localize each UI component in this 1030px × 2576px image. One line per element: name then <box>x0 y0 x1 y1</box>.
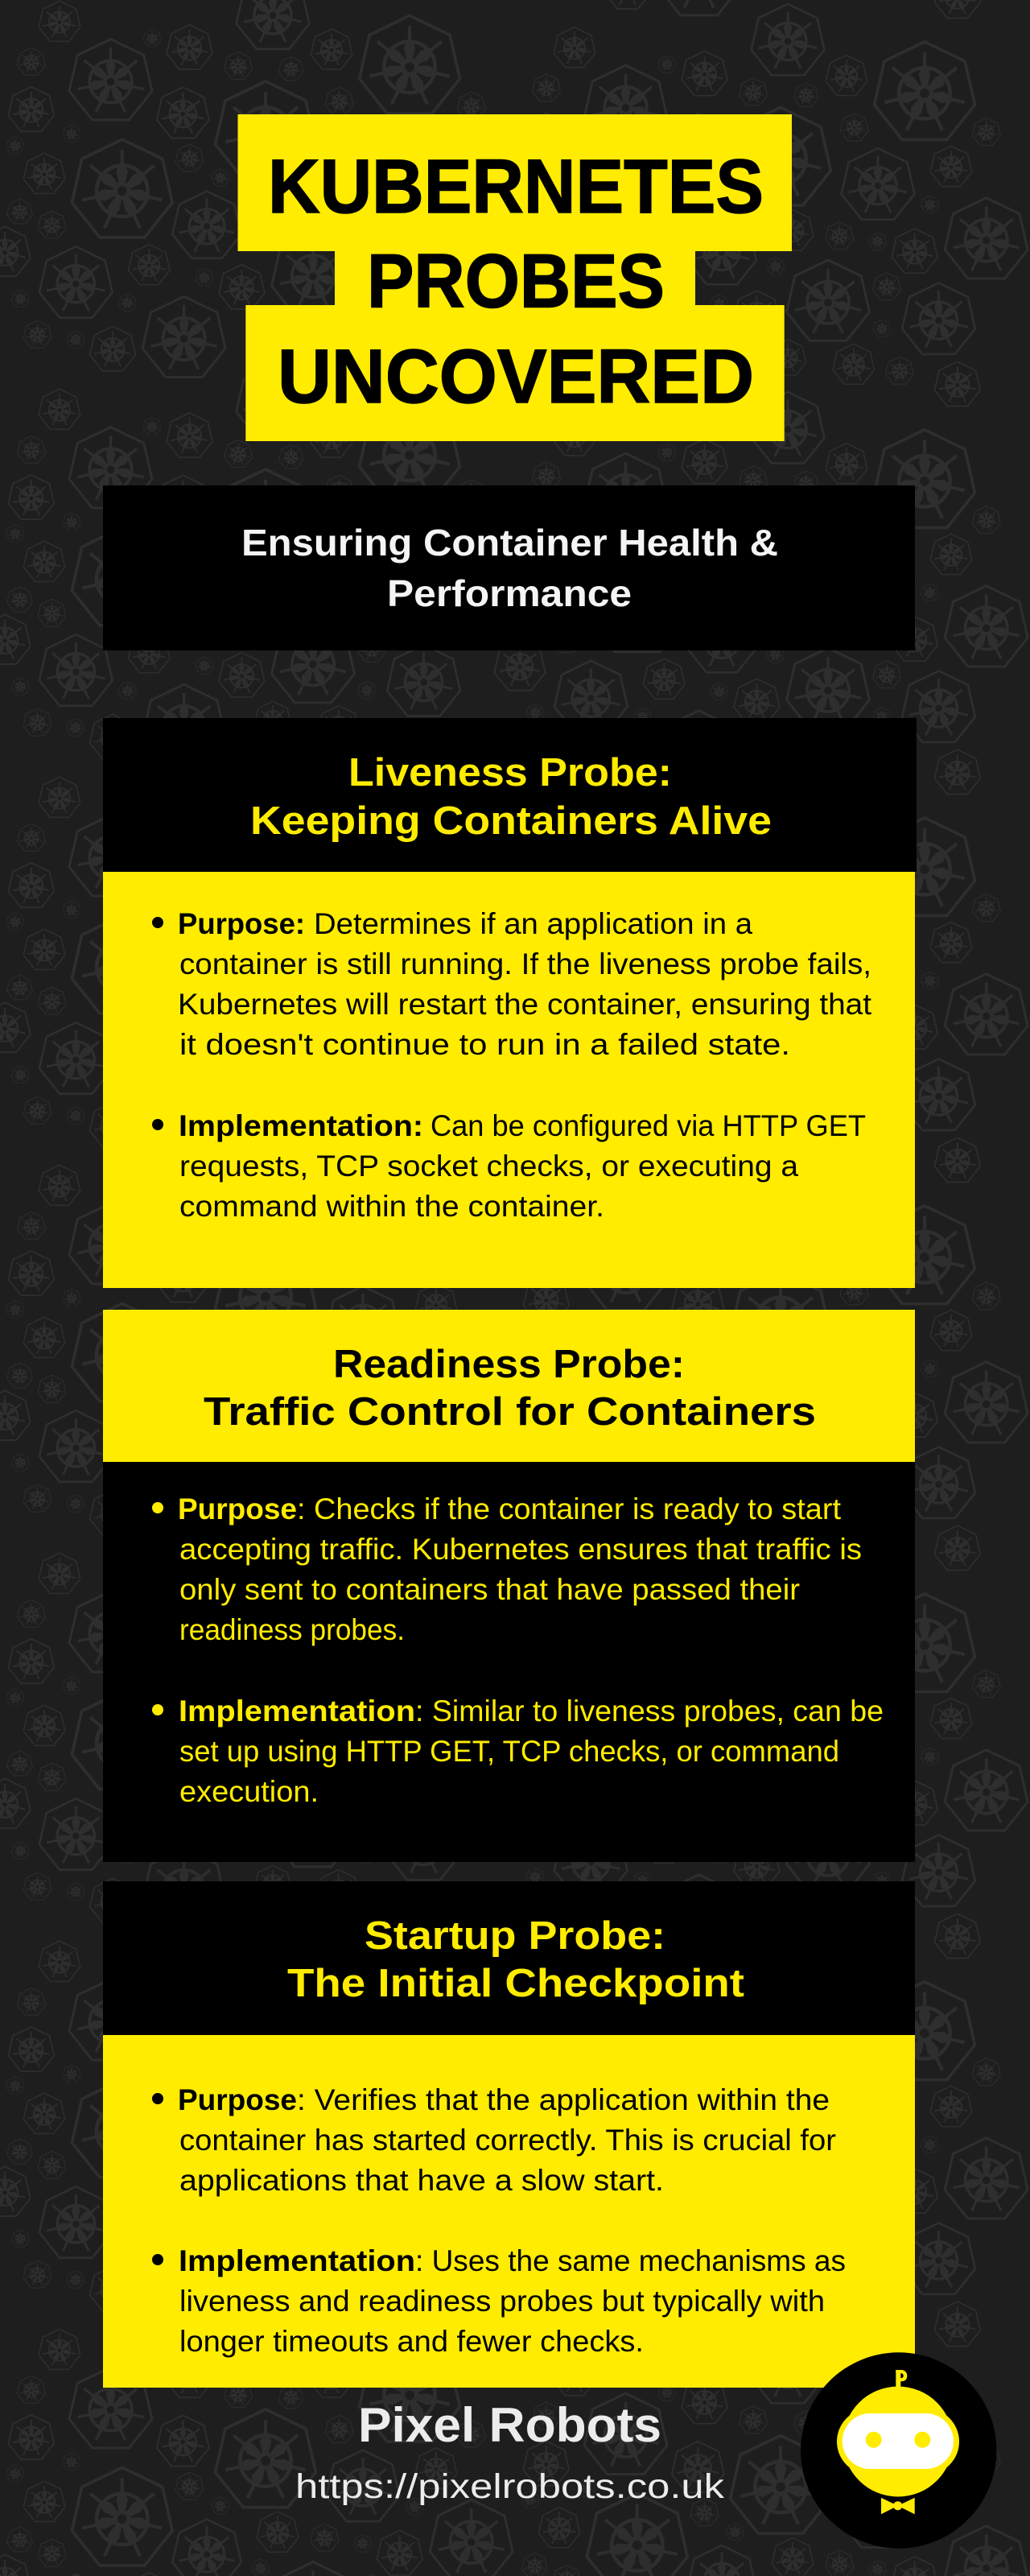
readiness body: : Similar to liveness probes, can be <box>415 1695 884 1728</box>
startup body <box>103 2035 915 2388</box>
startup body: longer timeouts and fewer checks. <box>179 2325 644 2358</box>
liveness body: container is still running. If the liveness probe fails, <box>179 947 871 980</box>
liveness body: Kubernetes will restart the container, ensuring that <box>178 988 872 1021</box>
subtitle banner: Performance <box>387 572 632 614</box>
readiness body: set up using HTTP GET, TCP checks, or command <box>179 1735 839 1768</box>
panel: readiness probe <box>103 1310 915 1862</box>
panel: startup probe <box>103 1881 915 2388</box>
startup body: Purpose <box>178 2083 297 2116</box>
startup heading: Startup Probe: <box>365 1914 665 1958</box>
startup body: container has started correctly. This is crucial for <box>179 2124 836 2157</box>
panel: liveness probe <box>103 718 917 1288</box>
startup heading <box>103 1881 915 2035</box>
startup body: applications that have a slow start. <box>179 2164 664 2197</box>
icon: robot logo <box>801 2352 996 2549</box>
liveness body: requests, TCP socket checks, or executing a <box>179 1150 798 1183</box>
startup body: liveness and readiness probes but typically with <box>179 2285 825 2318</box>
startup heading: The Initial Checkpoint <box>287 1962 744 2005</box>
startup body: Implementation <box>179 2244 415 2277</box>
liveness heading <box>103 718 917 872</box>
liveness body: it doesn't continue to run in a failed state. <box>179 1028 790 1061</box>
readiness body: only sent to containers that have passed their <box>179 1573 800 1606</box>
liveness body: Implementation: <box>179 1109 423 1142</box>
readiness body <box>103 1462 915 1862</box>
liveness body <box>103 872 915 1288</box>
readiness body: : Checks if the container is ready to start <box>297 1492 842 1525</box>
title: PROBES <box>367 238 665 324</box>
title <box>238 114 792 441</box>
liveness body: Determines if an application in a <box>314 907 752 940</box>
footer brand name: Pixel Robots <box>358 2398 661 2452</box>
liveness heading: Liveness Probe: <box>348 751 672 795</box>
title: UNCOVERED <box>278 334 754 419</box>
readiness heading: Traffic Control for Containers <box>204 1390 816 1434</box>
readiness body: Purpose <box>178 1492 297 1525</box>
liveness body: command within the container. <box>179 1190 604 1223</box>
readiness body: execution. <box>179 1775 319 1808</box>
readiness body: accepting traffic. Kubernetes ensures that traffic is <box>179 1533 862 1566</box>
liveness body: Purpose: <box>178 907 305 940</box>
startup body: : Verifies that the application within the <box>297 2083 830 2116</box>
readiness heading <box>103 1310 915 1462</box>
title: KUBERNETES <box>268 144 764 229</box>
liveness heading: Keeping Containers Alive <box>250 799 772 843</box>
liveness body: Can be configured via HTTP GET <box>431 1109 866 1142</box>
subtitle banner <box>103 485 915 650</box>
readiness heading: Readiness Probe: <box>333 1343 685 1386</box>
startup body: : Uses the same mechanisms as <box>415 2244 846 2277</box>
readiness body: readiness probes. <box>179 1613 405 1646</box>
readiness body: Implementation <box>179 1695 415 1728</box>
subtitle banner: Ensuring Container Health & <box>241 522 778 564</box>
footer url: https://pixelrobots.co.uk <box>295 2467 725 2506</box>
